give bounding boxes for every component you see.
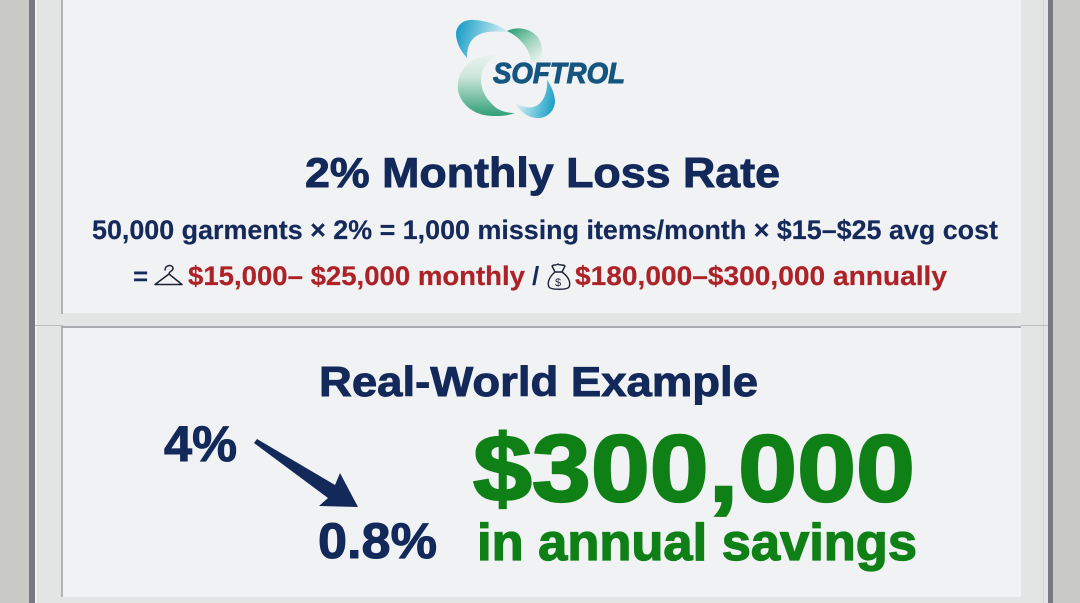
heading: Real-World Example: Real-World Example (319, 358, 758, 405)
stat: $300,000: $300,000 (473, 416, 915, 522)
panel: bottom (63, 328, 1021, 597)
icon: money bag: $ (555, 277, 561, 289)
text: calculation line: 50,000 garments × 2% = 1,000 missing items/month × $15–$25 avg cost (92, 215, 998, 245)
icon: money bag (548, 264, 570, 289)
text: in annual savings: in annual savings (477, 514, 917, 572)
heading: 2% Monthly Loss Rate: 2% Monthly Loss Rate (305, 149, 780, 196)
icon: hanger (155, 266, 182, 284)
stat: 4%: 4% (164, 416, 237, 472)
logo wordmark: SOFTROL (493, 58, 625, 90)
annual loss figure: $180,000–$300,000 annually (575, 261, 947, 291)
monthly loss figure: $15,000– $25,000 monthly (188, 261, 525, 291)
arrow: decline (254, 439, 358, 507)
panel: top (63, 0, 1021, 313)
slash: / (532, 261, 539, 291)
logo: Softrol (456, 20, 625, 118)
equals sign: = (133, 261, 148, 291)
text: results line (133, 261, 947, 291)
stat: 0.8%: 0.8% (318, 513, 437, 569)
